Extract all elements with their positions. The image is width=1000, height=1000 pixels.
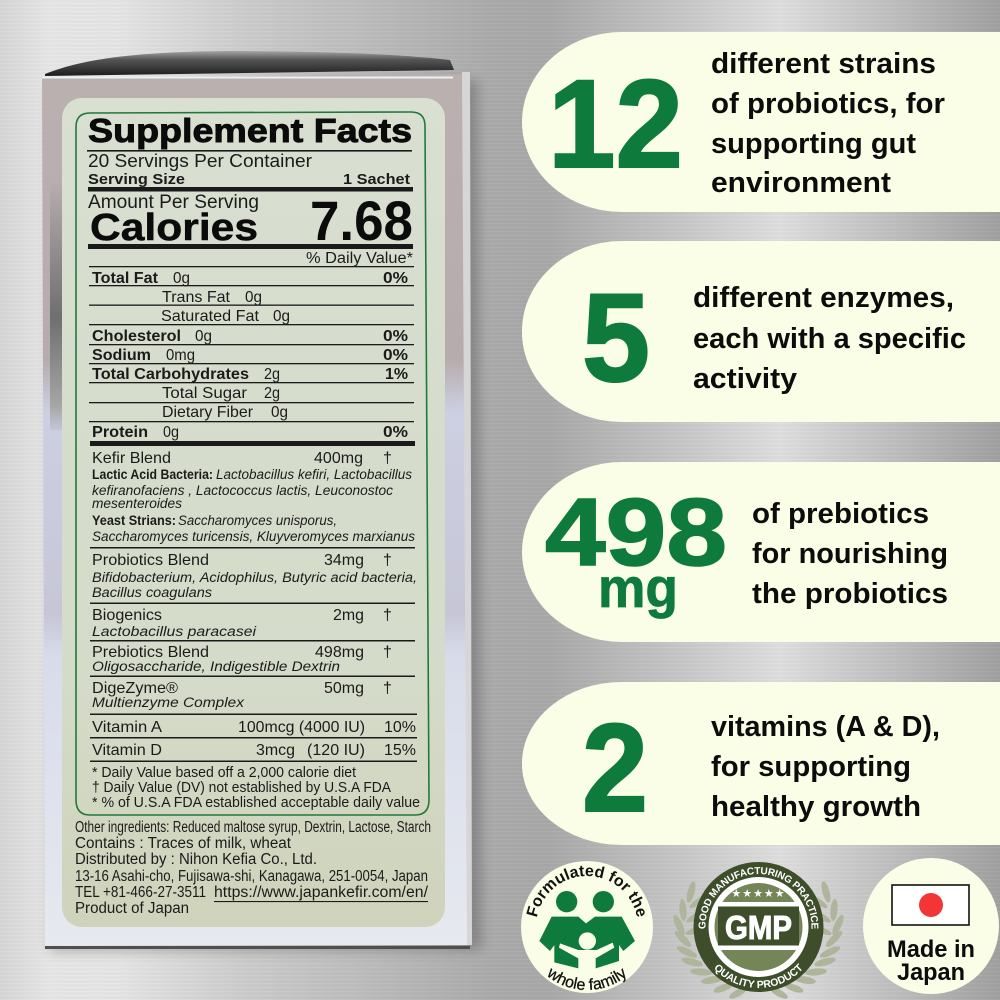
curved text: bottom: whole family [548,968,626,990]
panel: 5 enzymes [522,241,1000,422]
blend rows: Saccharomyces unisporus, [178,513,337,528]
nutrient rows: Saturated Fat [161,308,260,325]
icon: family [539,891,635,968]
description: prebiotics: for nourishing [752,538,948,570]
other ingredients and distributor: Contains : Traces of milk, wheat [75,835,292,852]
nutrient rows: 2g [264,366,280,383]
nutrient rows: 0% [383,424,408,441]
green facts border [76,112,429,815]
curved text: good manufacturing practice: GOOD MANUFACTURING PRACTICE [698,867,818,929]
stat: 498 mg [545,479,727,619]
panel: 2 vitamins [522,682,1000,845]
blend rows: Yeast Strians: [92,513,176,528]
box shadow [50,80,482,952]
daily value footnotes: * Daily Value based off a 2,000 calorie diet [92,765,356,781]
nutrient rows: Total Sugar [162,385,248,402]
description: strains: supporting gut [711,128,916,160]
calories block [88,189,413,267]
nutrient rows: Protein [92,424,148,441]
nutrient rows: 2g [264,385,280,402]
daily value footnotes: * % of U.S.A FDA established acceptable daily value [92,795,420,811]
nutrient rows: Total Carbohydrates [92,366,249,383]
vitamin rows: 100mcg (4000 IU) [238,719,365,736]
other ingredients and distributor [75,819,431,917]
supplement facts title: Supplement Facts [88,112,412,149]
made in Japan text: Japan [897,959,965,986]
panel: 498 mg prebiotics [522,462,1000,642]
vitamin rows: Vitamin A [92,719,162,736]
vitamin rows [92,719,416,759]
servings block: Serving Size [88,171,185,188]
blend rows: DigeZyme® [92,680,178,697]
other ingredients and distributor: Product of Japan [75,900,189,917]
other ingredients and distributor: Distributed by : Nihon Kefia Co., Ltd. [75,851,317,868]
description: strains: different strains [711,48,936,80]
description: strains: of probiotics, for [711,88,945,120]
nutrient rows: 0% [383,347,408,364]
blend rows: Biogenics [92,607,162,624]
calories block: Calories [90,207,258,249]
blend rows: Bacillus coagulans [92,585,212,600]
description: vitamins [711,711,940,823]
blend rows: Prebiotics Blend [92,644,209,661]
stat: 498 mg: 498 [545,479,727,586]
description: prebiotics: the probiotics [752,578,948,610]
badge: formulated for the whole family [521,861,653,993]
nutrient rows: 0g [195,328,212,345]
blend rows [92,450,417,710]
description: vitamins: for supporting [711,751,911,783]
blend rows: Oligosaccharide, Indigestible Dextrin [92,659,340,674]
nutrient rows: Trans Fat [162,289,231,306]
product box [42,51,482,952]
vitamin rows: (120 IU) [307,742,365,759]
other ingredients and distributor: Other ingredients: Reduced maltose syrup, Dextrin, Lactose, Starch [75,819,431,836]
blend rows: kefiranofaciens , Lactococcus lactis, Leuconostoc [92,483,393,498]
curved text: quality product: QUALITY PRODUCT [715,963,802,988]
other ingredients and distributor: https://www.japankefir.com/en/ [214,884,429,901]
vitamin rows: 3mcg [256,742,295,759]
description: vitamins: healthy growth [711,791,921,823]
blend rows: 2mg [333,607,364,624]
nutrient rows: 0g [271,404,288,421]
stat: 498 mg: mg [598,556,678,619]
box face [42,72,468,946]
blend rows: Multienzyme Complex [92,695,245,710]
blend rows: Bifidobacterium, Acidophilus, Butyric acid bacteria, [92,570,417,585]
calories block: Amount Per Serving [88,191,259,213]
blend rows: † [383,607,392,624]
label panel [62,98,445,927]
servings block [88,151,410,188]
description: enzymes: activity [693,363,797,395]
nutrient rows: Sodium [92,347,151,364]
daily value footnotes: † Daily Value (DV) not established by U.S.A FDA [92,780,391,796]
GMP band: GMP [725,909,792,946]
servings block: 1 Sachet [343,171,410,188]
calories block: % Daily Value* [306,250,413,267]
blend rows: 498mg [315,644,364,661]
nutrient rows: 0mg [166,347,195,364]
other ingredients and distributor: TEL +81-466-27-3511 [75,884,206,901]
laurel leaves [671,880,846,1000]
vitamin rows: 10% [384,719,416,736]
blend rows: Lactic Acid Bacteria: [92,467,213,482]
blend rows: 50mg [324,680,364,697]
description: strains [711,48,945,199]
nutrient rows: 0% [383,270,408,287]
GMP band [718,902,799,950]
blend rows: Lactobacillus paracasei [92,624,257,639]
blend rows: 34mg [324,552,364,569]
servings block: 20 Servings Per Container [88,151,312,171]
nutrient rows: Total Fat [92,270,159,287]
stat: 2: 2 [582,699,648,838]
blend rows: † [383,644,392,661]
nutrient rows: 0g [273,308,290,325]
made in Japan text [887,936,975,986]
stat: 12: 12 [548,55,683,194]
nutrient rows: 0g [245,289,262,306]
stat: 5: 5 [582,269,650,408]
description: enzymes: each with a specific [693,323,966,355]
nutrient rows: 0% [383,328,408,345]
made in Japan text: Made in [887,936,975,963]
description: enzymes [693,282,966,395]
box top flap [45,51,454,76]
nutrient rows [92,270,408,441]
description: prebiotics [752,498,948,610]
calories block: 7.68 [310,189,413,252]
badge: made in Japan [863,858,999,994]
nutrient rows: 0g [173,270,190,287]
badge: GMP [673,862,844,999]
icon: Japanese flag [892,885,969,925]
nutrient rows: 1% [385,366,408,383]
blend rows: † [383,680,392,697]
vitamin rows: Vitamin D [92,742,162,759]
nutrient rows: Cholesterol [92,328,181,345]
blend rows: Kefir Blend [92,450,171,467]
blend rows: Probiotics Blend [92,552,209,569]
nutrient rows: Dietary Fiber [162,404,254,421]
nutrient rows: 0g [163,424,179,441]
description: prebiotics: of prebiotics [752,498,929,530]
vitamin rows: 15% [384,742,416,759]
blend rows: † [383,552,392,569]
description: strains: environment [711,167,891,199]
curved text: top: Formulated for the [526,866,645,917]
blend rows: Lactobacillus kefiri, Lactobacillus [216,467,412,482]
blend rows: † [383,450,392,467]
seal ring [694,862,824,992]
blend rows: mesenteroides [92,496,182,511]
description: vitamins: vitamins (A & D), [711,711,940,743]
stars: ★★★★★ [731,887,786,900]
daily value footnotes [92,765,420,811]
description: enzymes: different enzymes, [693,282,954,314]
blend rows: 400mg [314,450,363,467]
blend rows: Saccharomyces turicensis, Kluyveromyces marxianus [92,529,415,544]
other ingredients and distributor: 13-16 Asahi-cho, Fujisawa-shi, Kanagawa, 251-0054, Japan [75,868,428,885]
panel: 12 strains [522,32,1000,212]
